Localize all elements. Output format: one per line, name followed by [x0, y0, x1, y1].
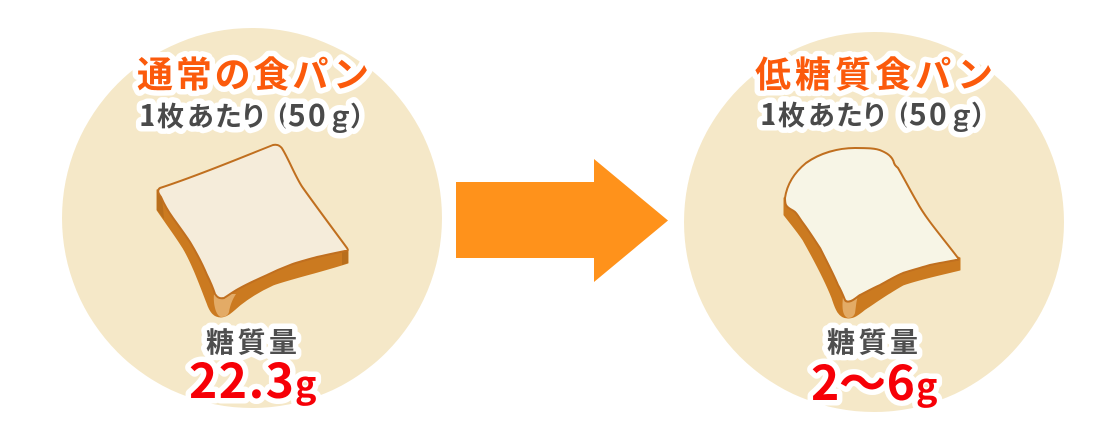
panel: low-carb bread [684, 32, 1064, 414]
icon: square bread slice [157, 145, 348, 317]
subtitle: per slice: た [215, 95, 242, 134]
background circle right [684, 32, 1064, 412]
subtitle: per slice: ｇ [327, 95, 354, 134]
background circle left [62, 28, 442, 408]
subtitle: per slice: 0 [929, 90, 947, 134]
subtitle: per slice: ｇ [948, 94, 975, 133]
value: 22.3g: g [295, 356, 316, 408]
value: 2–6g: g [916, 358, 938, 410]
subtitle: per slice: 枚 [157, 95, 184, 134]
subtitle: per slice: り [861, 94, 888, 133]
subtitle: per slice: （ [883, 94, 910, 133]
subtitle: per slice: り [240, 95, 267, 134]
title: regular bread: 通常の食パン [137, 46, 369, 98]
subtitle: per slice: ） [350, 95, 377, 134]
label: sugar amount: 糖質量 [206, 321, 297, 361]
subtitle: per slice: た [836, 94, 863, 133]
subtitle: per slice: 5 [909, 90, 927, 134]
subtitle: per slice: 5 [288, 91, 306, 135]
subtitle: per slice: あ [187, 95, 214, 134]
subtitle: per slice: ） [971, 94, 998, 133]
subtitle: per slice: あ [808, 94, 835, 133]
subtitle: per slice: （ [262, 95, 289, 134]
value: 22.3g: 22.3 [189, 342, 294, 412]
value: 2–6g: 2～6 [811, 344, 915, 414]
subtitle: per slice: 0 [308, 91, 326, 135]
label: sugar amount: 糖質量 [827, 321, 918, 361]
panel: regular bread [62, 28, 442, 412]
subtitle: per slice: 1 [760, 90, 778, 134]
icon: low-carb bread slice [784, 148, 960, 318]
subtitle: per slice: 1 [139, 91, 157, 135]
subtitle: per slice: 枚 [778, 94, 805, 133]
title: low-carb bread: 低糖質食パン [755, 46, 993, 98]
arrow [456, 159, 668, 282]
